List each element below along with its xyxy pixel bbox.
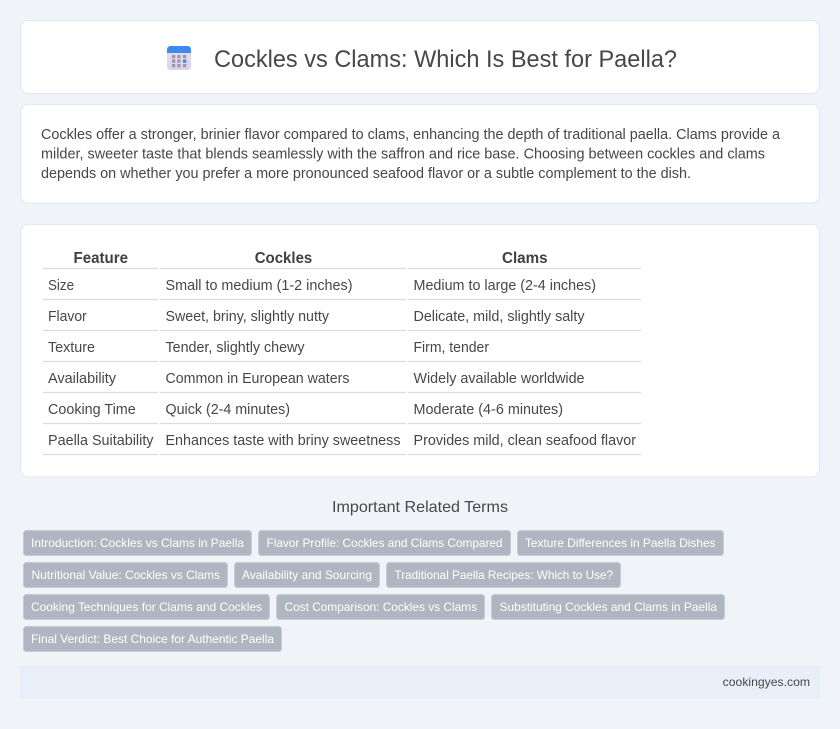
table row: texture: Tender, slightly chewy [166, 340, 305, 356]
tag [518, 530, 724, 556]
tag: Flavor Profile: Cockles and Clams Compared [266, 536, 502, 550]
text block: intro paragraph: depends on whether you prefer a more pronounced seafood flavor or a subtle complement to the dish. [41, 166, 691, 182]
table row: size: Medium to large (2-4 inches) [414, 278, 596, 294]
tag [24, 626, 282, 652]
tag [24, 594, 270, 620]
heading: related terms: Important Related Terms [332, 499, 508, 516]
tag [24, 562, 228, 588]
tag: Introduction: Cockles vs Clams in Paella [31, 536, 244, 550]
tag [258, 530, 510, 556]
table row: availability: Widely available worldwide [414, 371, 584, 387]
tag: Traditional Paella Recipes: Which to Use? [394, 568, 613, 582]
table row: cooking time: Quick (2-4 minutes) [166, 402, 290, 418]
table row: paella suitability: Provides mild, clean seafood flavor [414, 433, 636, 449]
tag: Texture Differences in Paella Dishes [525, 536, 716, 550]
tag: Availability and Sourcing [242, 568, 372, 582]
table row: flavor: Flavor [48, 309, 87, 325]
icon: calendar [167, 46, 191, 70]
table row: size [48, 278, 596, 294]
tag [386, 562, 620, 588]
panel: related term tags [24, 530, 724, 652]
table header: Cockles [255, 250, 312, 267]
footer [20, 665, 820, 699]
table row: flavor: Delicate, mild, slightly salty [414, 309, 585, 325]
panel: comparison table [20, 224, 820, 477]
tag [492, 594, 724, 620]
table row: cooking time: Moderate (4-6 minutes) [414, 402, 563, 418]
tag: Substituting Cockles and Clams in Paella [500, 600, 717, 614]
table row: availability [48, 371, 584, 387]
tag [234, 562, 380, 588]
text block: intro paragraph: Cockles offer a stronger, brinier flavor compared to clams, enhancing the depth of traditional paella. Clams provide a [41, 127, 780, 143]
panel: introduction [20, 104, 820, 203]
tag: Nutritional Value: Cockles vs Clams [32, 568, 220, 582]
tag [276, 594, 484, 620]
table row: texture [48, 340, 489, 356]
table header: Clams [502, 250, 548, 267]
text block: intro paragraph [41, 127, 780, 182]
table row: size: Size [48, 278, 74, 294]
table row: flavor [48, 309, 585, 325]
tag: Final Verdict: Best Choice for Authentic Paella [31, 632, 274, 646]
tag: Cost Comparison: Cockles vs Clams [284, 600, 477, 614]
table row: cooking time: Cooking Time [48, 402, 136, 418]
table row: texture: Texture [48, 340, 95, 356]
table row: availability: Availability [48, 371, 117, 387]
text block: intro paragraph: milder, sweeter taste that blends seamlessly with the saffron and rice base. Choosing between cockles and clams [41, 146, 765, 162]
table row: size: Small to medium (1-2 inches) [166, 278, 352, 294]
tag [24, 530, 252, 556]
tag: Cooking Techniques for Clams and Cockles [31, 600, 262, 614]
title: Cockles vs Clams: Which Is Best for Paella? [214, 46, 677, 73]
footer: cookingyes.com [723, 675, 810, 689]
table row: cooking time [48, 402, 563, 418]
panel: header [20, 20, 820, 94]
table row: paella suitability: Paella Suitability [48, 433, 154, 449]
table row: texture: Firm, tender [414, 340, 489, 356]
table row: availability: Common in European waters [166, 371, 350, 387]
table header: Feature [74, 250, 128, 267]
table header [74, 250, 548, 267]
table row: paella suitability: Enhances taste with briny sweetness [166, 433, 400, 449]
table row: paella suitability [48, 433, 636, 449]
table row: flavor: Sweet, briny, slightly nutty [166, 309, 330, 325]
